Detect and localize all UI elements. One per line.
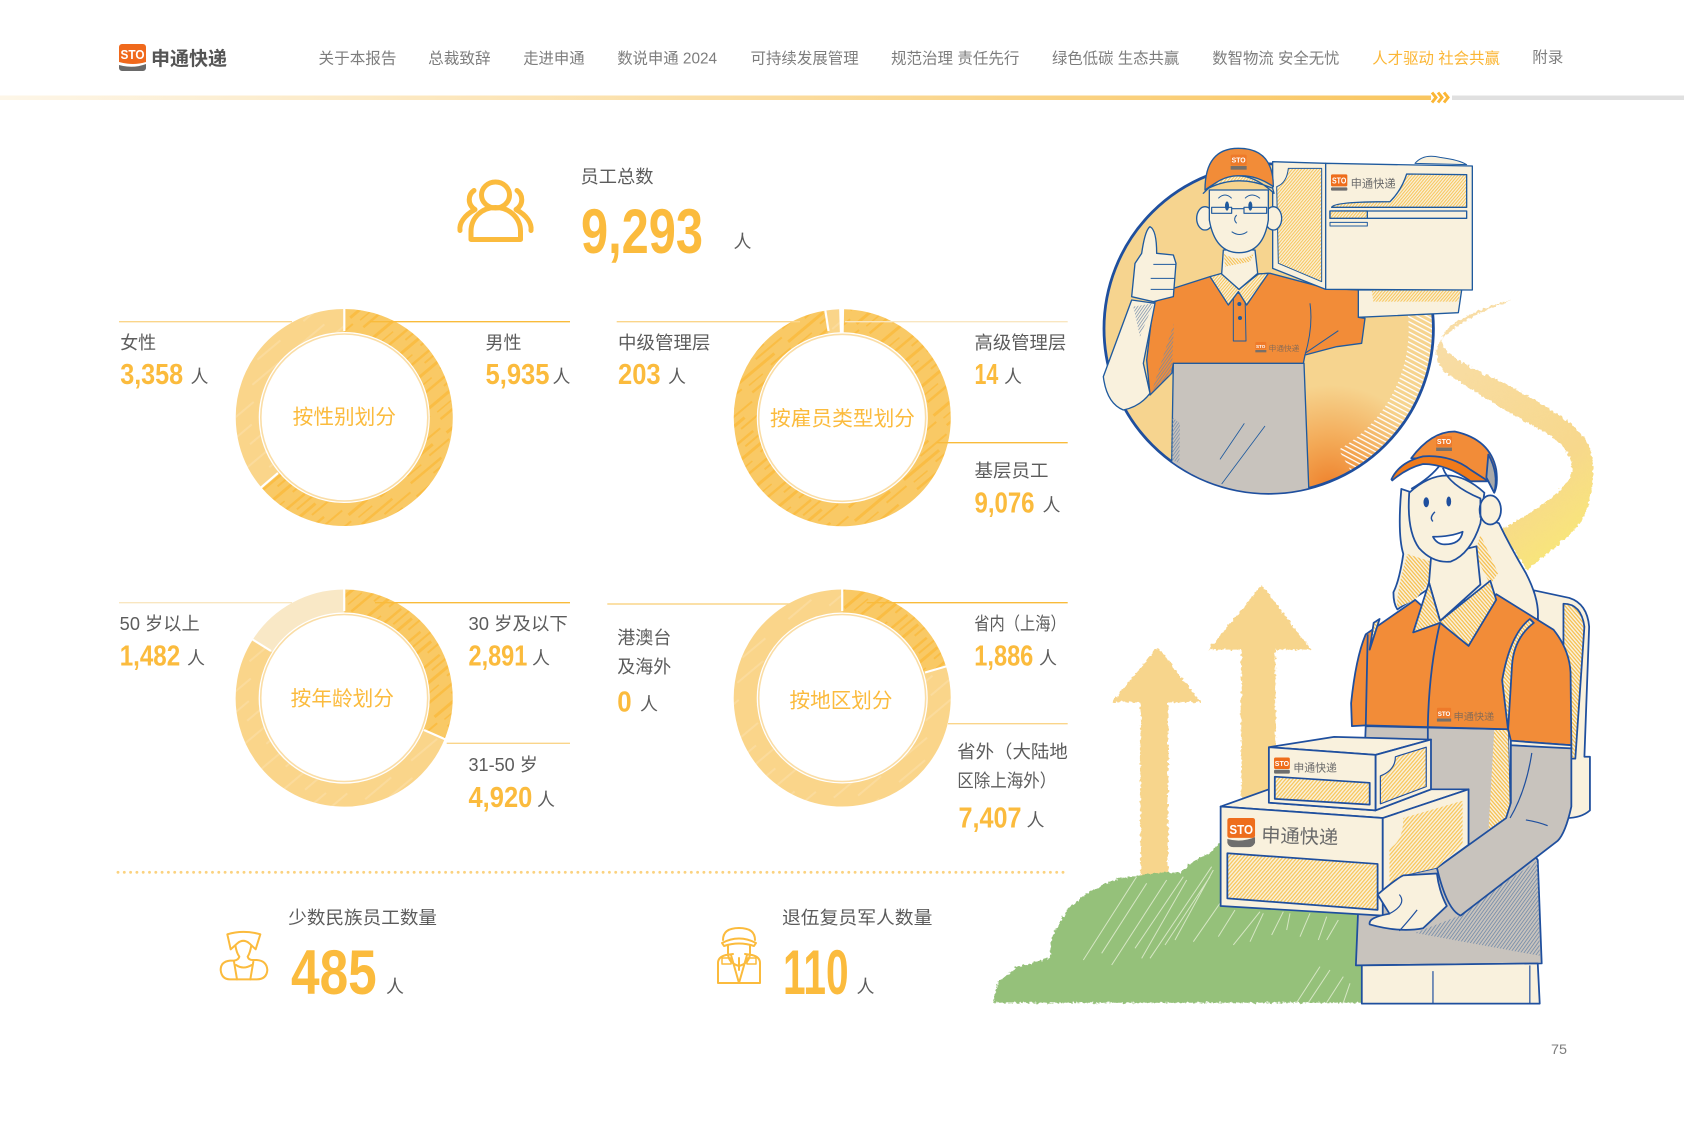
progress bar <box>0 92 1684 102</box>
illustration: yellow swirl path <box>1436 300 1593 570</box>
logo: STO: 申通快递 <box>151 48 227 70</box>
30 and under: 30 岁及以下 <box>468 614 568 634</box>
nav items: 人才驱动 社会共赢 <box>1372 50 1500 68</box>
frontline staff: 基层员工 <box>974 461 1048 481</box>
HK Macao Taiwan and overseas: 人 <box>640 695 658 715</box>
label: 员工总数 <box>580 167 654 187</box>
30 and under: 2,891 <box>468 640 527 672</box>
nav items: 数说申通 2024 <box>617 50 717 68</box>
value: 110 <box>783 938 849 1008</box>
box logo <box>1331 174 1396 191</box>
orange shirt <box>1147 273 1365 395</box>
raised arm under box <box>1358 290 1462 317</box>
outside Shanghai <box>957 742 1068 834</box>
cap logo: STO <box>1232 156 1246 165</box>
within Shanghai: 1,886 <box>974 641 1033 673</box>
lower box logo: 申通快递 <box>1261 825 1339 849</box>
value: 485 <box>291 938 377 1008</box>
cap logo: STO <box>1437 437 1451 446</box>
label: 少数民族员工数量 <box>288 908 437 928</box>
center label: 按雇员类型划分 <box>770 408 915 430</box>
mid management: 中级管理层 <box>618 333 710 353</box>
over 50 <box>120 614 205 672</box>
over 50: 1,482 <box>120 640 180 672</box>
shirt logo: 申通快递 <box>1454 710 1494 723</box>
nav items: 附录 <box>1532 48 1563 66</box>
outside Shanghai: 省外（大陆地 <box>957 742 1068 762</box>
panel: age donut <box>119 585 570 814</box>
label: 退伍复员军人数量 <box>782 908 932 928</box>
31 to 50: 31-50 岁 <box>468 755 538 775</box>
shirt logo: STO <box>1438 711 1450 718</box>
30 and under: 人 <box>532 648 550 668</box>
lower box logo: STO <box>1229 822 1253 837</box>
senior management <box>974 333 1066 391</box>
box <box>1273 156 1472 290</box>
outside Shanghai: 7,407 <box>958 802 1022 834</box>
nav items: 走进申通 <box>523 50 585 68</box>
thumbs-up arm <box>1103 227 1176 410</box>
trousers <box>1362 963 1540 1004</box>
center label: 按地区划分 <box>790 690 892 712</box>
31 to 50: 4,920 <box>468 782 532 814</box>
head <box>1197 148 1282 289</box>
HK Macao Taiwan and overseas: 及海外 <box>617 657 671 677</box>
illustration: woman carrying boxes <box>1221 431 1590 1004</box>
cap logo <box>1436 436 1452 451</box>
stat: veterans <box>718 908 932 1008</box>
male: 人 <box>552 367 570 387</box>
hands <box>1370 873 1447 931</box>
value: 9,293 <box>581 197 703 267</box>
icon: minority person <box>221 932 267 979</box>
31 to 50 <box>468 755 555 814</box>
HK Macao Taiwan and overseas: 港澳台 <box>617 628 671 648</box>
outside Shanghai: 区除上海外） <box>957 771 1056 791</box>
illustration: green hill <box>993 830 1362 1003</box>
shirt logo <box>1255 342 1300 353</box>
upper box logo: STO <box>1275 759 1289 768</box>
female <box>120 333 208 391</box>
box logo: STO <box>1332 176 1346 185</box>
unit: 人 <box>734 232 752 252</box>
within Shanghai: 人 <box>1039 649 1057 669</box>
donut ring <box>247 585 449 795</box>
31 to 50: 人 <box>537 790 555 810</box>
shirt logo: STO <box>1256 344 1265 350</box>
within Shanghai <box>974 614 1066 673</box>
figure <box>1103 148 1472 503</box>
HK Macao Taiwan and overseas <box>617 628 671 719</box>
frontline staff <box>974 461 1060 520</box>
frontline staff: 人 <box>1042 496 1060 516</box>
orange shirt <box>1351 594 1571 799</box>
total employees <box>460 167 752 267</box>
outside Shanghai: 人 <box>1026 810 1044 830</box>
stat: ethnic minority employees <box>221 908 437 1008</box>
upper box logo: 申通快递 <box>1293 760 1337 774</box>
page number: 75 <box>1551 1041 1567 1057</box>
dotted divider <box>118 871 1068 874</box>
lower box logo <box>1227 818 1339 849</box>
panel: employment type donut <box>617 305 1068 520</box>
female: 人 <box>190 367 208 387</box>
mid management <box>618 333 710 391</box>
head <box>1409 464 1501 562</box>
backpack <box>1534 590 1590 818</box>
panel: gender donut <box>119 305 570 514</box>
grey apron <box>1356 726 1542 965</box>
senior management: 14 <box>974 359 998 391</box>
unit: 人 <box>856 977 874 997</box>
nav items <box>318 48 1563 68</box>
logo: STO: STO <box>120 47 144 62</box>
illustration: upward arrows <box>1112 585 1311 878</box>
nav items: 总裁致辞 <box>428 50 491 68</box>
over 50: 人 <box>187 648 205 668</box>
male: 男性 <box>486 333 522 353</box>
nav items: 可持续发展管理 <box>750 50 859 68</box>
illustration: man holding box in circle <box>1103 148 1472 503</box>
nav items: 规范治理 责任先行 <box>891 50 1019 68</box>
lower box <box>1221 789 1469 916</box>
shirt logo <box>1437 708 1494 723</box>
donut ring <box>745 585 951 795</box>
circle background <box>1104 164 1433 493</box>
donut ring <box>745 305 939 515</box>
upper box <box>1269 737 1431 810</box>
male: 5,935 <box>486 359 550 391</box>
donut ring <box>247 305 441 514</box>
female: 3,358 <box>120 359 183 391</box>
nav items: 关于本报告 <box>318 50 396 68</box>
header navigation <box>0 44 1684 102</box>
unit: 人 <box>386 977 404 997</box>
logo: STO <box>119 44 227 71</box>
grey apron <box>1171 363 1309 503</box>
senior management: 人 <box>1004 367 1022 387</box>
nav items: 数智物流 安全无忧 <box>1212 50 1340 68</box>
over 50: 50 岁以上 <box>120 614 200 634</box>
within Shanghai: 省内（上海） <box>974 614 1066 634</box>
HK Macao Taiwan and overseas: 0 <box>617 687 632 719</box>
male <box>486 333 570 391</box>
neck and collar <box>1413 546 1496 646</box>
frontline staff: 9,076 <box>974 488 1034 520</box>
sleeve and arm <box>1437 741 1571 916</box>
nav items: 绿色低碳 生态共赢 <box>1052 50 1179 68</box>
cap <box>1391 431 1497 493</box>
center label: 按年龄划分 <box>291 688 394 710</box>
mid management: 人 <box>668 367 686 387</box>
icon: people group <box>460 182 531 240</box>
hair <box>1393 489 1538 627</box>
30 and under <box>468 614 568 672</box>
panel: region donut <box>607 585 1068 834</box>
center label: 按性别划分 <box>293 406 396 429</box>
icon: veteran with cap <box>718 928 760 983</box>
box logo: 申通快递 <box>1351 176 1396 190</box>
senior management: 高级管理层 <box>974 333 1066 353</box>
mid management: 203 <box>618 359 661 391</box>
shirt logo: 申通快递 <box>1269 343 1300 353</box>
female: 女性 <box>120 333 156 353</box>
cap logo <box>1231 155 1247 170</box>
upper box logo <box>1274 758 1337 774</box>
